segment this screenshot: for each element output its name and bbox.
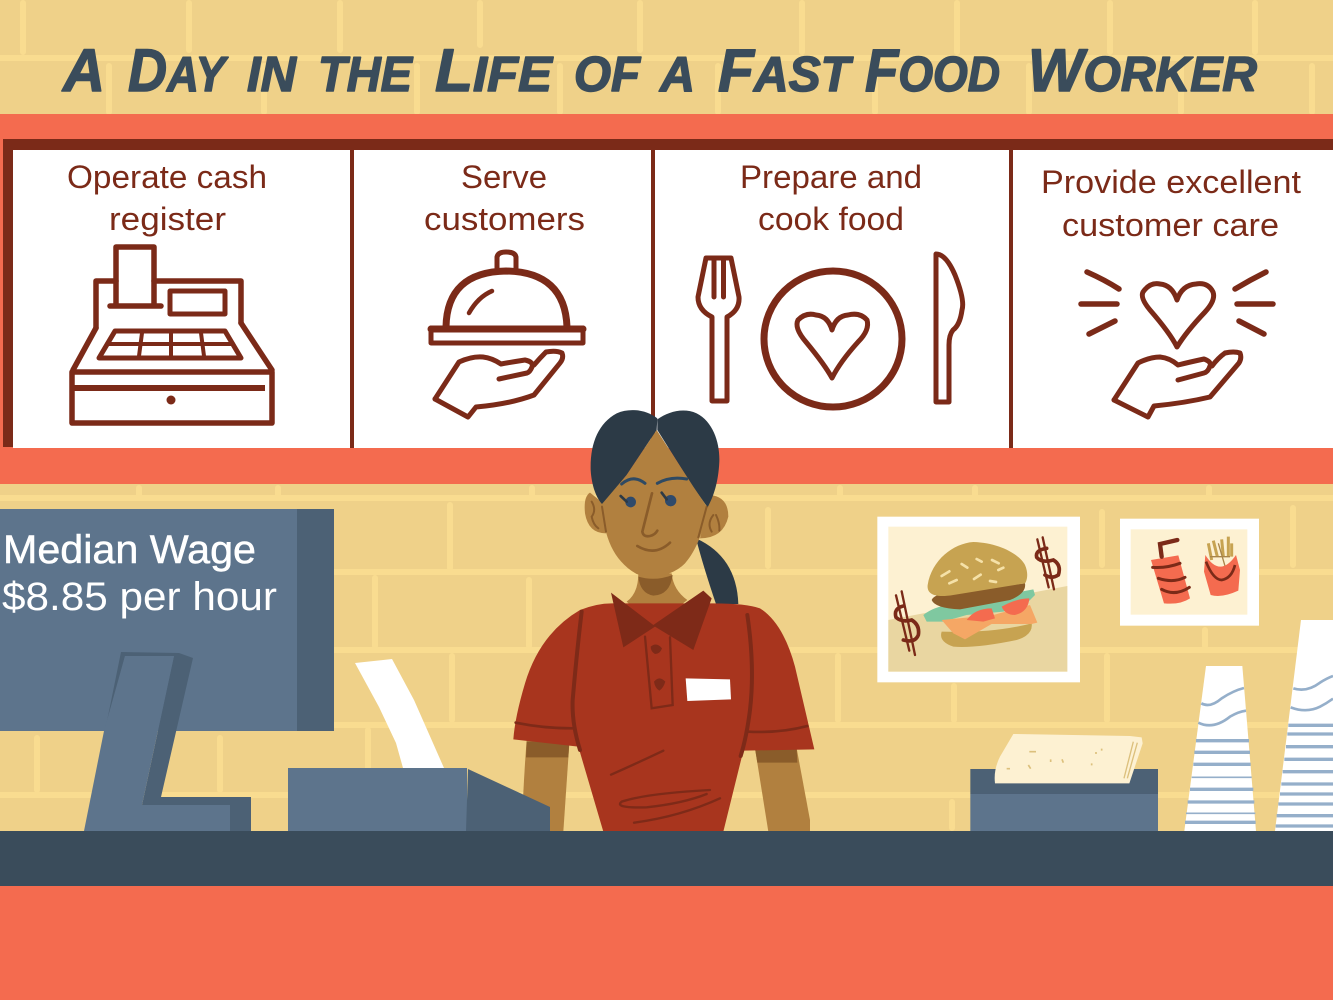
title: WORKER [1028, 37, 1258, 104]
cup stack right [1275, 620, 1333, 831]
ponytail [696, 538, 738, 604]
picture: burger [877, 517, 1080, 682]
arms [522, 740, 810, 832]
menu board band [0, 114, 1333, 484]
cup stack left [1184, 666, 1256, 831]
paper cup stacks [1184, 620, 1333, 831]
neck [627, 573, 687, 627]
picture: drink and fries [1120, 519, 1259, 626]
title: A [61, 37, 105, 104]
heading: prepare and cook food: Prepare and [740, 159, 922, 195]
title: FOOD [865, 37, 1000, 104]
heading: serve customers: customers [424, 201, 585, 237]
heading: operate cash register: register [109, 201, 226, 237]
heading: serve customers: Serve [461, 159, 547, 195]
title: IN [247, 48, 298, 102]
title: A [659, 48, 695, 102]
receipt printer [288, 659, 550, 831]
title: OF [574, 48, 641, 102]
shirt [513, 591, 814, 832]
wage text: $8.85 per hour [2, 575, 277, 619]
ears [585, 493, 728, 538]
icon: heart over hand [1081, 272, 1273, 417]
heading: provide excellent customer care: customer care [1062, 207, 1279, 243]
icon: cloche on hand [431, 252, 583, 417]
counter [0, 831, 1333, 1000]
heading: prepare and cook food: cook food [758, 201, 904, 237]
title: THE [318, 48, 413, 102]
napkin tray [970, 734, 1158, 831]
face [592, 430, 719, 577]
panel: prepare and cook food [698, 159, 963, 407]
title: DAY [128, 37, 229, 104]
title: LIFE [435, 37, 553, 104]
panel: serve customers [424, 159, 585, 417]
title [61, 37, 1258, 104]
panel: operate cash register [67, 159, 272, 423]
icon: cash register [72, 247, 272, 423]
hair [591, 410, 719, 507]
fast food worker [513, 410, 814, 832]
napkins [995, 734, 1143, 783]
heading: operate cash register: Operate cash [67, 159, 267, 195]
monitor [0, 509, 334, 831]
wage text: Median Wage [3, 528, 256, 572]
icon: plate, fork and knife [698, 254, 963, 407]
panel: provide excellent customer care [1041, 164, 1301, 417]
wall pictures [877, 517, 1259, 682]
title: FAST [718, 37, 854, 104]
heading: provide excellent customer care: Provide excellent [1041, 164, 1301, 200]
icon: dollar signs [895, 537, 1059, 655]
